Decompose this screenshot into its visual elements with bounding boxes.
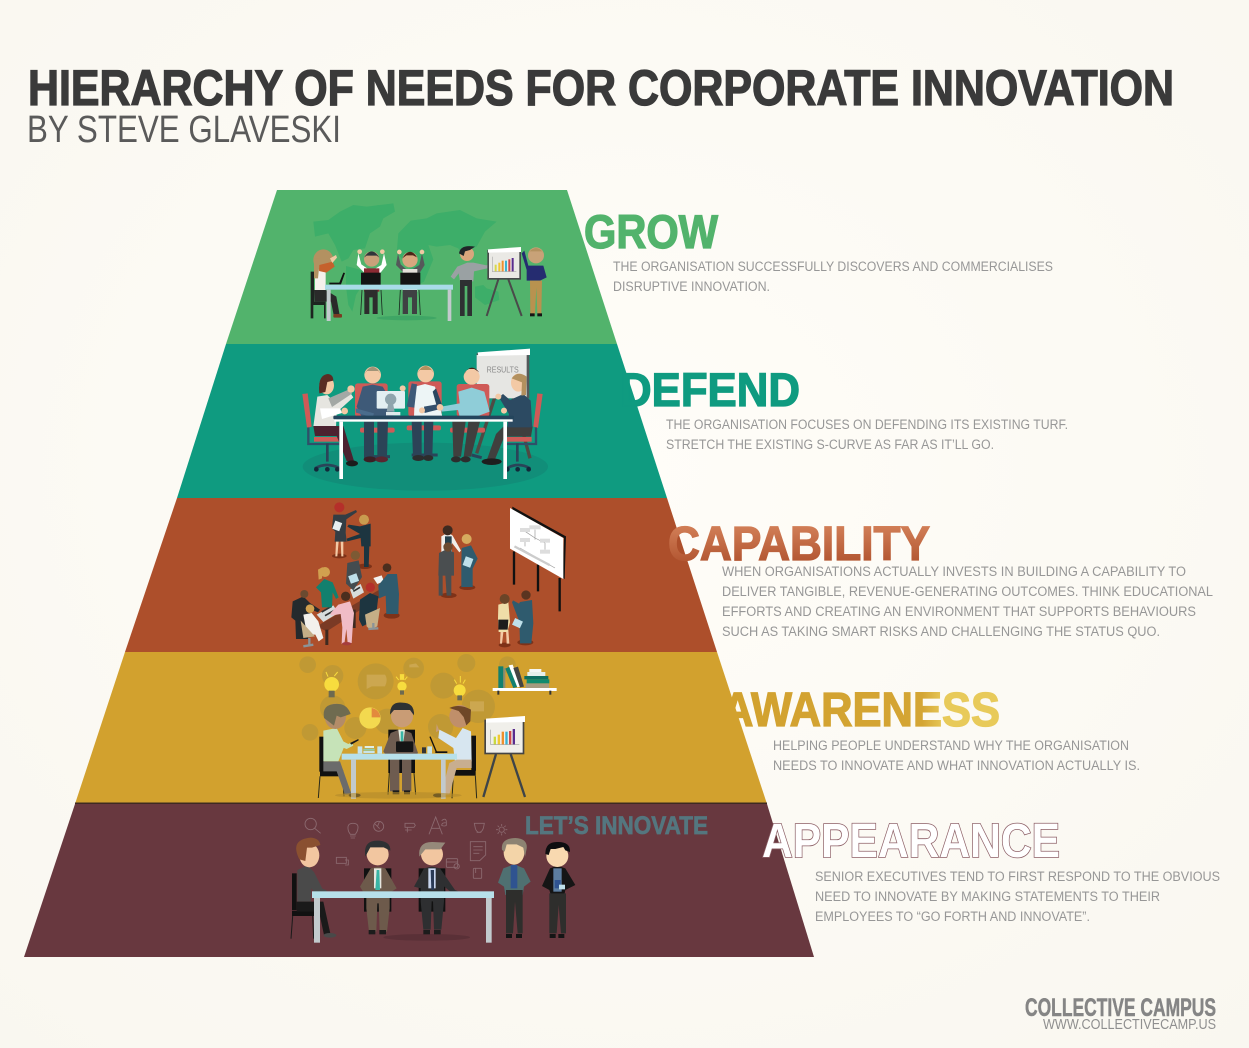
man 4 in light blue [437,368,490,462]
heading: defend: DEFEND [620,363,800,416]
footer: brand [1025,994,1216,1033]
line icons [305,817,507,878]
left man in green shirt [323,704,361,797]
man 5 on right [482,374,533,465]
man with raised arms, grey sleeves [396,250,425,315]
awareness table [335,754,462,799]
pair at top left [332,502,372,569]
description: grow [613,259,1053,295]
man 2 with monitor [356,367,406,462]
bookshelf [493,665,557,695]
description: appearance: NEED TO INNOVATE BY MAKING STATEMENTS TO THEIR [815,889,1160,905]
desk group [291,551,400,646]
pyramid tier: appearance [24,804,814,957]
idea circles [299,654,516,741]
man in navy sweater [522,247,547,316]
website: WWW.COLLECTIVECAMP.US [1043,1016,1216,1033]
man 3 in white shirt [407,366,442,461]
world map [313,203,499,312]
illustration: grow team with world map [311,203,547,321]
description: defend: STRETCH THE EXISTING S-CURVE AS FAR AS IT’LL GO. [666,437,994,453]
description: awareness [773,738,1140,774]
description: grow: DISRUPTIVE INNOVATION. [613,279,770,295]
heading: appearance: APPEARANCE [762,815,1060,868]
man in brown suit [360,841,397,934]
subtitle: BY STEVE GLAVESKI [27,109,341,151]
pyramid tier: defend [177,344,667,498]
pair at lower right [498,590,533,647]
section: appearance [762,815,1220,925]
flip chart with bars [487,247,522,316]
description: awareness: HELPING PEOPLE UNDERSTAND WHY THE ORGANISATION [773,738,1129,754]
description: defend [666,417,1068,453]
man in teal at right end [378,574,399,614]
illustration: appearance team [291,817,575,943]
description: capability: EFFORTS AND CREATING AN ENVIRONMENT THAT SUPPORTS BEHAVIOURS [722,604,1196,620]
table items [358,737,447,754]
heading: capability: CAPABILITY [668,518,930,571]
standing man at desk [346,560,362,590]
presenter [451,246,491,316]
description: defend: THE ORGANISATION FOCUSES ON DEFENDING ITS EXISTING TURF. [666,417,1068,433]
man in dark suit [414,842,458,934]
flip chart [483,716,525,797]
description: capability: WHEN ORGANISATIONS ACTUALLY INVESTS IN BUILDING A CAPABILITY TO [722,564,1186,580]
pair in the centre [438,525,478,598]
description: capability: SUCH AS TAKING SMART RISKS AND CHALLENGING THE STATUS QUO. [722,624,1160,640]
chairs [302,381,543,472]
section: awareness [722,684,1140,774]
illustration: awareness team [299,654,557,799]
description: capability [722,564,1213,640]
illustration: capability team [291,502,566,647]
section: capability [668,518,1213,640]
man with raised arms, white sleeves [357,249,387,315]
illustration: defend meeting [302,349,548,491]
monitor [377,391,405,415]
pyramid [24,190,814,957]
results flip chart [477,349,530,458]
seated blond woman [303,613,323,641]
chairs [318,730,477,798]
floor shadow [383,934,470,941]
heading: awareness: AWARENESS [722,684,1000,737]
pyramid tier: grow [226,190,617,344]
pyramid tier: awareness [75,652,767,804]
description: appearance: EMPLOYEES TO “GO FORTH AND INNOVATE”. [815,909,1090,925]
meeting table [333,416,514,479]
woman on left [313,374,358,466]
description: grow: THE ORGANISATION SUCCESSFULLY DISCOVERS AND COMMERCIALISES [613,259,1053,275]
results flip chart: RESULTS [487,365,519,375]
org chart board [510,507,566,611]
light bulbs [324,672,466,700]
woman with laptop [311,249,345,318]
seated man left [291,838,336,939]
right man in blue shirt [433,705,472,797]
description: appearance [815,869,1220,925]
dark man at left [291,596,320,639]
woman in pink [331,601,354,644]
centre man in brown suit [383,703,418,794]
table [325,285,453,321]
pyramid tier: capability [125,498,717,652]
standing man in black jacket [542,842,575,938]
appearance table [312,891,494,943]
woman in green [316,579,339,607]
pie chart [359,707,381,729]
floor shadow [303,443,548,491]
heading: let's innovate: LET’S INNOVATE [525,812,708,840]
red-haired man seated [359,593,378,626]
section: defend [620,363,1068,453]
description: awareness: NEEDS TO INNOVATE AND WHAT INNOVATION ACTUALLY IS. [773,758,1140,774]
heading: grow: GROW [584,205,719,258]
section: grow [584,205,1053,295]
standing man in green jacket [498,838,531,938]
